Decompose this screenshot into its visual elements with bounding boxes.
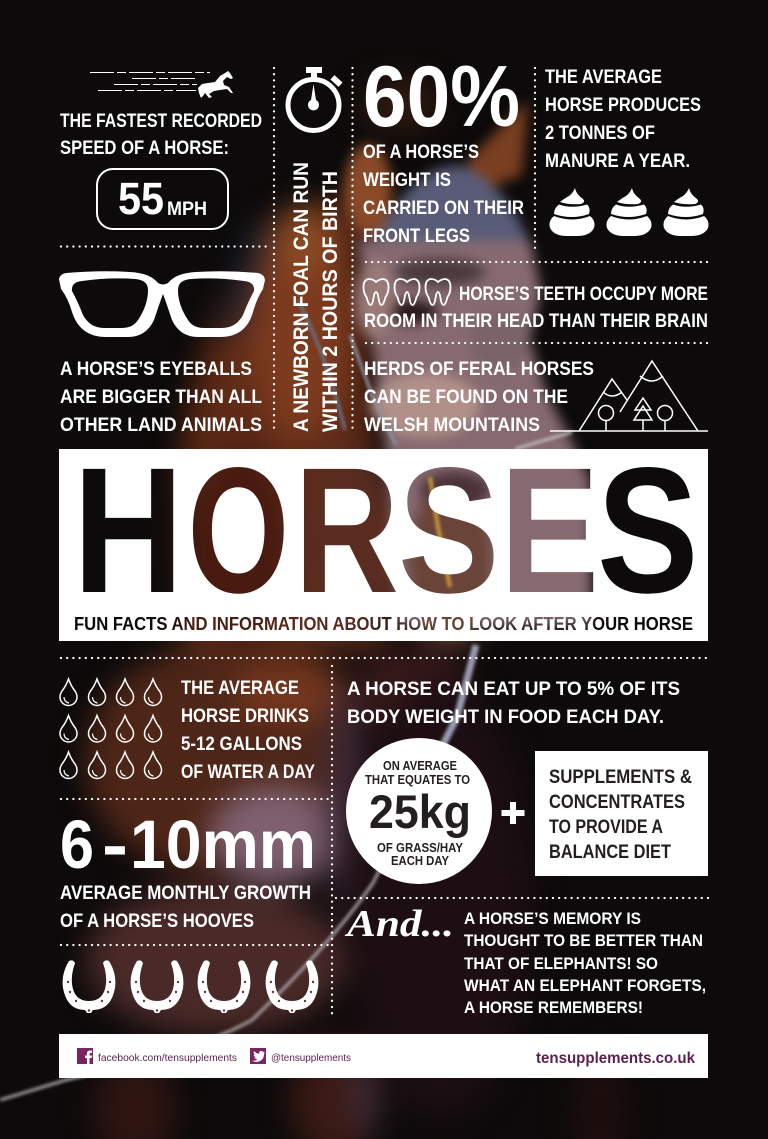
icon: twitter (250, 1048, 266, 1064)
text: hoof growth (60, 882, 311, 932)
subtitle: FUN FACTS AND INFORMATION ABOUT HOW TO LOOK AFTER YOUR HORSE (74, 613, 693, 634)
text: water fact: THE AVERAGE (181, 677, 299, 699)
text: manure fact: 2 TONNES OF (545, 122, 655, 144)
text: teeth fact: HORSE’S TEETH OCCUPY MORE (459, 283, 708, 305)
callout: 25kg circle: ON AVERAGE (383, 759, 457, 773)
text: eyeballs fact: ARE BIGGER THAN ALL (60, 386, 262, 408)
text: food fact: A HORSE CAN EAT UP TO 5% OF ITS (347, 678, 680, 700)
text: feral horses fact: CAN BE FOUND ON THE (364, 386, 568, 408)
text: memory fact: THAT OF ELEPHANTS! SO (464, 955, 658, 973)
title: S (398, 430, 500, 630)
icon: facebook (77, 1048, 93, 1064)
text: newborn foal (vertical): WITHIN 2 HOURS OF BIRTH (319, 171, 342, 432)
text: feral horses fact: HERDS OF FERAL HORSES (364, 358, 594, 380)
callout: 25kg circle: EACH DAY (391, 854, 450, 868)
text: weight on front legs: OF A HORSE’S (363, 141, 479, 163)
text: manure fact: MANURE A YEAR. (545, 150, 690, 172)
text: memory fact: A HORSE REMEMBERS! (464, 999, 643, 1017)
text: eyeballs fact (60, 358, 262, 436)
title panel: HORSES with photo showing through the letters (59, 430, 708, 641)
text: eyeballs fact: A HORSE’S EYEBALLS (60, 358, 252, 380)
stat: 6-10mm: - (102, 806, 128, 883)
text: memory fact (464, 910, 706, 1017)
text: food fact (347, 678, 680, 728)
text: manure fact: THE AVERAGE (545, 66, 662, 88)
twitter handle: @tensupplements (271, 1052, 351, 1064)
title: H (73, 430, 184, 630)
callout: 25kg circle: OF GRASS/HAY (377, 841, 464, 855)
title: S (597, 430, 698, 630)
text: weight on front legs: CARRIED ON THEIR (363, 197, 524, 219)
panel: supplements: CONCENTRATES (549, 791, 685, 813)
text: food fact: BODY WEIGHT IN FOOD EACH DAY. (347, 706, 664, 728)
icon: plus sign (502, 802, 524, 824)
website: tensupplements.co.uk (536, 1050, 695, 1067)
text: water fact: HORSE DRINKS (181, 705, 309, 727)
text: water fact: 5-12 GALLONS (181, 733, 302, 755)
title: R (294, 430, 399, 630)
callout: 55 mph badge: MPH (167, 199, 207, 220)
text: water fact: OF WATER A DAY (181, 761, 315, 783)
stat: 60 percent: 60% (363, 49, 520, 145)
callout: 55 mph badge (97, 169, 228, 229)
icon: galloping horse with speed lines (90, 71, 233, 98)
icon: three teeth (364, 279, 450, 305)
panel: supplements: TO PROVIDE A (549, 816, 663, 838)
icon: stopwatch (288, 67, 343, 130)
callout: 55 mph badge: 55 (118, 173, 164, 224)
icon: three manure piles (550, 188, 708, 236)
stat: 6-10mm: 6 (60, 806, 94, 883)
text: fastest recorded speed: SPEED OF A HORSE: (60, 137, 229, 159)
heading: And...: And... (345, 903, 454, 945)
footer bar (59, 1034, 708, 1078)
panel: supplements: SUPPLEMENTS & (549, 766, 692, 788)
text: weight on front legs: WEIGHT IS (363, 169, 451, 191)
title: O (188, 430, 289, 630)
text: newborn foal (vertical) (290, 162, 342, 432)
stat: 6-10mm: 10mm (130, 806, 316, 883)
panel: supplements: BALANCE DIET (549, 841, 671, 863)
facebook address: facebook.com/tensupplements (98, 1052, 237, 1064)
icon: glasses (59, 271, 265, 337)
title: E (500, 430, 599, 630)
text: newborn foal (vertical): A NEWBORN FOAL CAN RUN (290, 162, 313, 432)
text: fastest recorded speed: THE FASTEST RECORDED (60, 110, 262, 132)
text: hoof growth: AVERAGE MONTHLY GROWTH (60, 882, 311, 904)
text: fastest recorded speed (60, 110, 262, 159)
text: feral horses fact: WELSH MOUNTAINS (364, 414, 540, 436)
callout: 25kg circle (346, 738, 492, 884)
text: manure fact (545, 66, 701, 172)
text: manure fact: HORSE PRODUCES (545, 94, 701, 116)
callout: 25kg circle: 25kg (369, 785, 471, 838)
text: teeth fact (364, 283, 708, 332)
text: weight on front legs (363, 141, 524, 247)
text: feral horses fact (364, 358, 594, 436)
text: water fact (181, 677, 315, 783)
icon: water drops grid (60, 679, 162, 778)
text: teeth fact: ROOM IN THEIR HEAD THAN THEIR BRAIN (364, 310, 708, 332)
text: weight on front legs: FRONT LEGS (363, 225, 470, 247)
text: memory fact: A HORSE’S MEMORY IS (464, 910, 641, 928)
text: memory fact: THOUGHT TO BE BETTER THAN (464, 932, 703, 950)
panel: supplements (535, 751, 708, 876)
icon: mountains and trees (550, 361, 708, 431)
callout: 25kg circle: THAT EQUATES TO (365, 773, 470, 787)
text: eyeballs fact: OTHER LAND ANIMALS (60, 414, 262, 436)
text: hoof growth: OF A HORSE’S HOOVES (60, 910, 254, 932)
icon: four horseshoes (63, 960, 318, 1013)
text: memory fact: WHAT AN ELEPHANT FORGETS, (464, 977, 706, 995)
